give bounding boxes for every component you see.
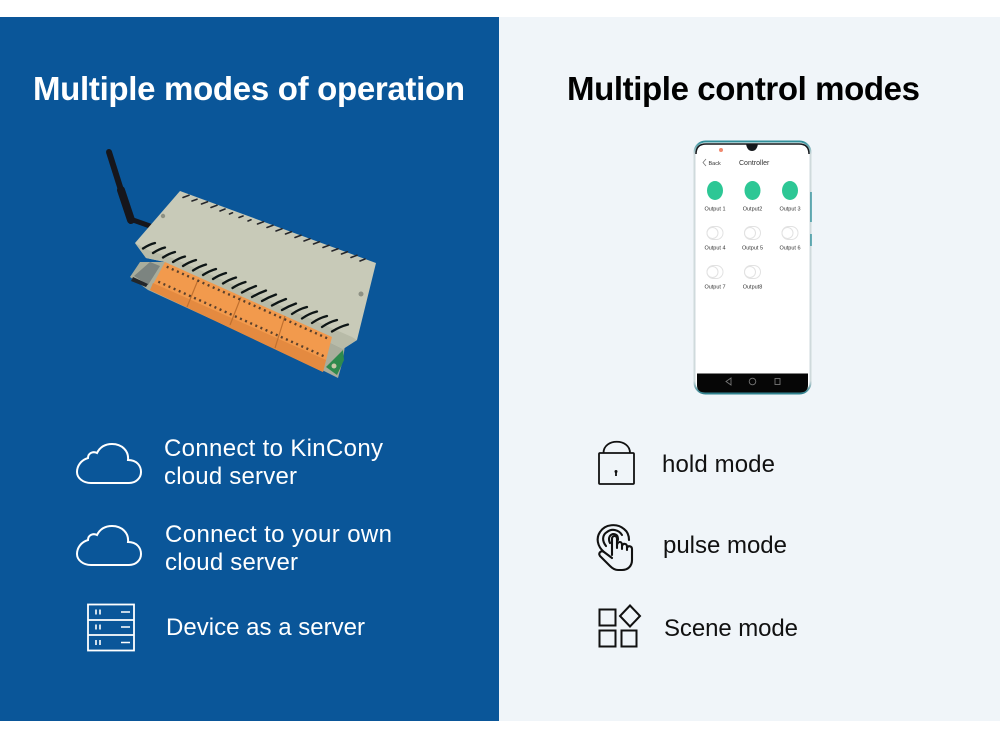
heading: modes of operation: Multiple modes of operation bbox=[33, 70, 465, 107]
text: connect to KinCony: cloud server bbox=[164, 463, 297, 490]
device photo: relay controller bbox=[109, 152, 376, 378]
mode: pulse bbox=[598, 525, 787, 570]
output labels: Output 7 bbox=[704, 284, 726, 290]
device base and connectors bbox=[130, 262, 345, 378]
icon: cloud bbox=[77, 444, 141, 483]
output labels: Output 4 bbox=[704, 246, 726, 252]
icon: padlock bbox=[599, 442, 634, 484]
side buttons bbox=[810, 192, 812, 246]
text: connect to your own: cloud server bbox=[165, 549, 298, 576]
text: connect to your own: Connect to your own bbox=[165, 521, 392, 548]
text: hold mode: hold mode bbox=[662, 451, 775, 478]
output labels: Output 6 bbox=[779, 246, 801, 252]
icon: cloud bbox=[77, 526, 141, 565]
panel: multiple control modes bbox=[499, 17, 1000, 721]
device lid bbox=[135, 191, 376, 349]
output labels: Output2 bbox=[743, 206, 762, 212]
phone mockup: controller app: Controller bbox=[739, 160, 770, 167]
antenna bbox=[109, 152, 150, 226]
phone mockup: controller app: Back bbox=[708, 161, 721, 167]
orange terminal blocks bbox=[150, 262, 332, 372]
active outputs bbox=[707, 181, 798, 200]
mode: scene bbox=[600, 606, 798, 646]
inactive outputs bbox=[707, 226, 798, 278]
text: device as a server: Device as a server bbox=[166, 614, 365, 641]
output labels: Output 5 bbox=[742, 246, 763, 252]
output labels: Output 3 bbox=[779, 206, 801, 212]
app header bbox=[703, 159, 706, 166]
text: pulse mode: pulse mode bbox=[663, 532, 787, 559]
phone mockup: controller app bbox=[694, 142, 811, 394]
output labels: Output 1 bbox=[704, 206, 726, 212]
feature: device as a server bbox=[88, 604, 365, 650]
panel: multiple modes of operation bbox=[0, 17, 499, 721]
mode: hold bbox=[599, 442, 775, 484]
ventilation slots bbox=[143, 243, 348, 332]
icon: scene grid bbox=[600, 606, 640, 646]
notch and camera bbox=[746, 144, 758, 151]
icon: server rack bbox=[88, 604, 134, 650]
phone body bbox=[694, 142, 810, 394]
heading: control modes: Multiple control modes bbox=[567, 70, 920, 107]
output labels: Output8 bbox=[743, 284, 762, 290]
feature: own cloud server bbox=[77, 521, 392, 576]
text: connect to KinCony: Connect to KinCony bbox=[164, 435, 383, 462]
navigation bar bbox=[697, 374, 808, 392]
text: scene mode: Scene mode bbox=[664, 615, 798, 642]
feature: KinCony cloud server bbox=[77, 435, 383, 490]
output labels bbox=[704, 206, 801, 290]
icon: touch hand bbox=[598, 525, 632, 570]
